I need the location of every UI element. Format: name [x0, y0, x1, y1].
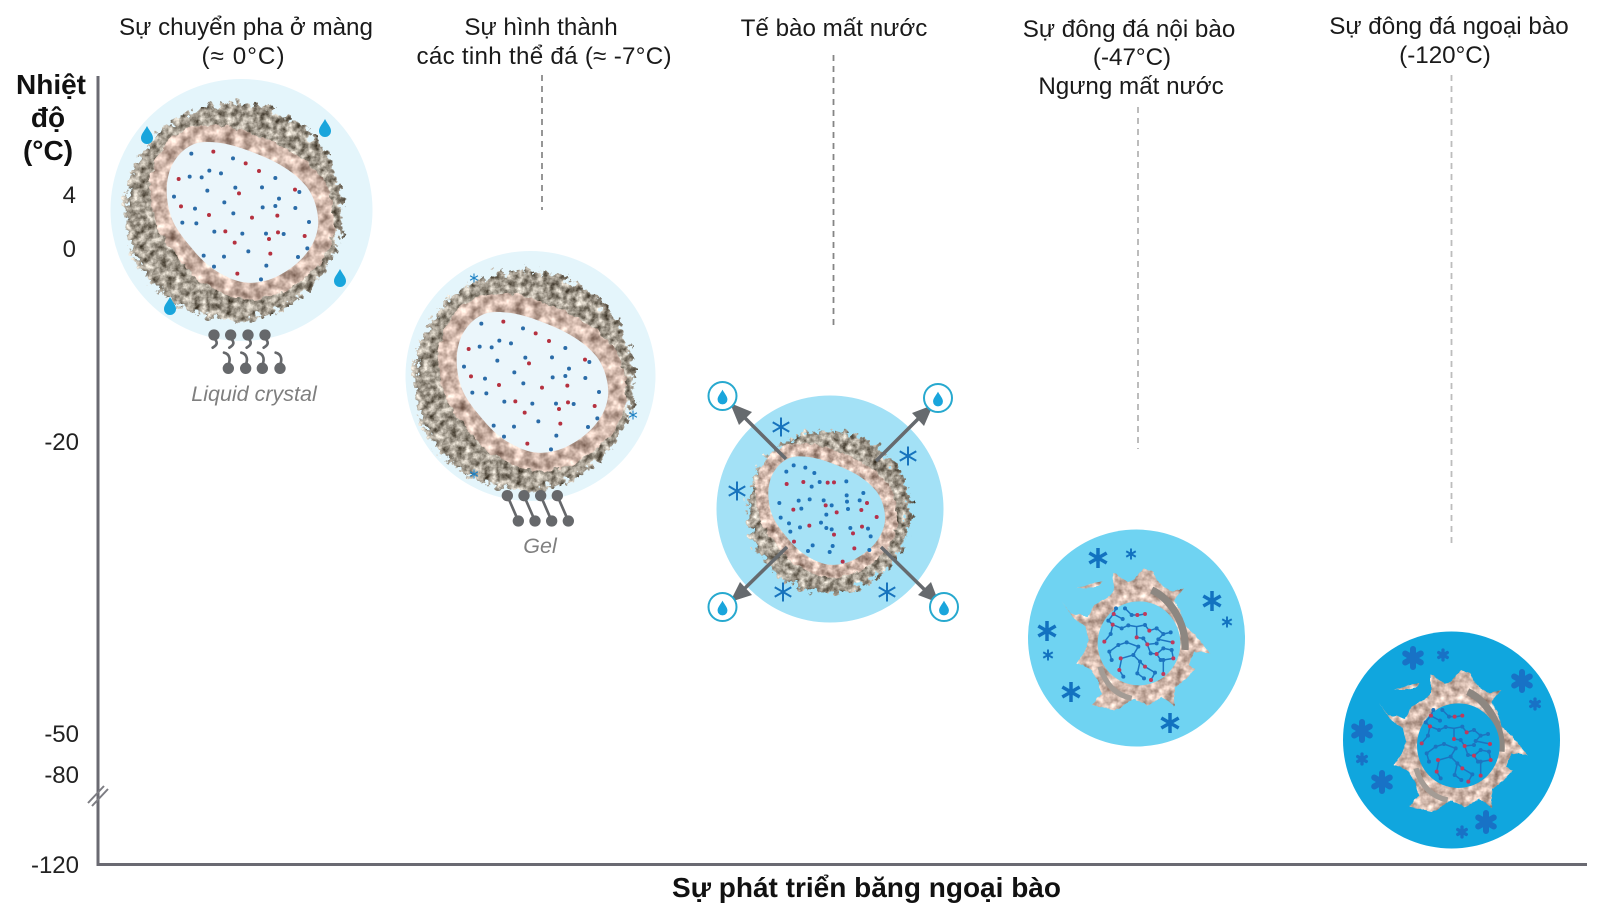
- label: liquid crystal: Liquid crystal: [191, 382, 318, 406]
- temperature tick labels: -120: [31, 852, 79, 879]
- y axis title: (°C): [23, 135, 73, 166]
- small ice crystals 2: [470, 274, 637, 478]
- heading: stage 5: (-120°C): [1399, 42, 1491, 69]
- ice crystals 4: [1038, 548, 1232, 733]
- arrow: water leaving top right: [876, 405, 933, 461]
- y axis title: độ: [31, 102, 65, 133]
- heading: stage 1: [119, 14, 373, 70]
- label: gel: Gel: [523, 534, 558, 558]
- x axis title: Sự phát triển băng ngoại bào: [672, 872, 1061, 903]
- water drop icons 3: [708, 382, 958, 621]
- background disc 5: [1343, 632, 1560, 848]
- y axis title: Nhiệt: [16, 69, 86, 100]
- water drops 1: [141, 119, 346, 315]
- heading: stage 2: Sự hình thành: [464, 14, 618, 41]
- heading: stage 3: Tế bào mất nước: [741, 15, 927, 42]
- ruptured cell 4: [1062, 568, 1210, 710]
- heading: stage 2: [416, 14, 672, 70]
- ice crystals 3: [729, 418, 916, 602]
- background halo 1: [110, 79, 372, 341]
- heading: stage 2: các tinh thể đá (≈ -7°C): [416, 43, 672, 70]
- arrow: water leaving top left: [730, 403, 786, 459]
- background halo 2: [406, 251, 656, 501]
- cell 2: [414, 271, 634, 491]
- heading: stage 1: Sự chuyển pha ở màng: [119, 14, 373, 41]
- axis break mark: [88, 786, 108, 806]
- temperature tick labels: 0: [63, 236, 76, 263]
- temperature tick labels: -20: [44, 429, 79, 456]
- temperature tick labels: 4: [63, 182, 76, 209]
- heading: stage 4: (-47°C): [1093, 44, 1171, 71]
- panel: cell stage 5: [1343, 632, 1560, 848]
- arrow: water leaving bottom right: [881, 547, 939, 603]
- panel: cell stage 2: [406, 251, 656, 558]
- temperature tick labels: -80: [44, 762, 79, 789]
- ice flakes 5: [1354, 649, 1539, 837]
- cell 3: [747, 430, 910, 593]
- heading: stage 5: [1329, 13, 1569, 69]
- background disc 4: [1028, 530, 1245, 746]
- background halo 3: [716, 396, 944, 622]
- lipid bilayer: liquid crystal: [208, 329, 286, 374]
- cell 1: [125, 103, 343, 320]
- temperature tick labels: -50: [44, 721, 79, 748]
- leader lines: [542, 55, 1452, 544]
- ruptured cell 5: [1379, 670, 1528, 812]
- panel: cell stage 1: [110, 79, 372, 406]
- heading: stage 4: Sự đông đá nội bào: [1023, 16, 1235, 43]
- heading: stage 4: [1023, 16, 1235, 100]
- panel: cell stage 4: [1028, 530, 1245, 746]
- temperature tick labels: [31, 182, 79, 879]
- heading: stage 4: Ngưng mất nước: [1038, 73, 1224, 100]
- panel: cell stage 3: [708, 382, 958, 622]
- lipid bilayer: gel: [502, 490, 574, 527]
- heading: stage 1: (≈ 0°C): [202, 43, 284, 70]
- arrow: water leaving bottom left: [730, 547, 787, 602]
- heading: stage 5: Sự đông đá ngoại bào: [1329, 13, 1569, 40]
- y axis title: [16, 69, 86, 166]
